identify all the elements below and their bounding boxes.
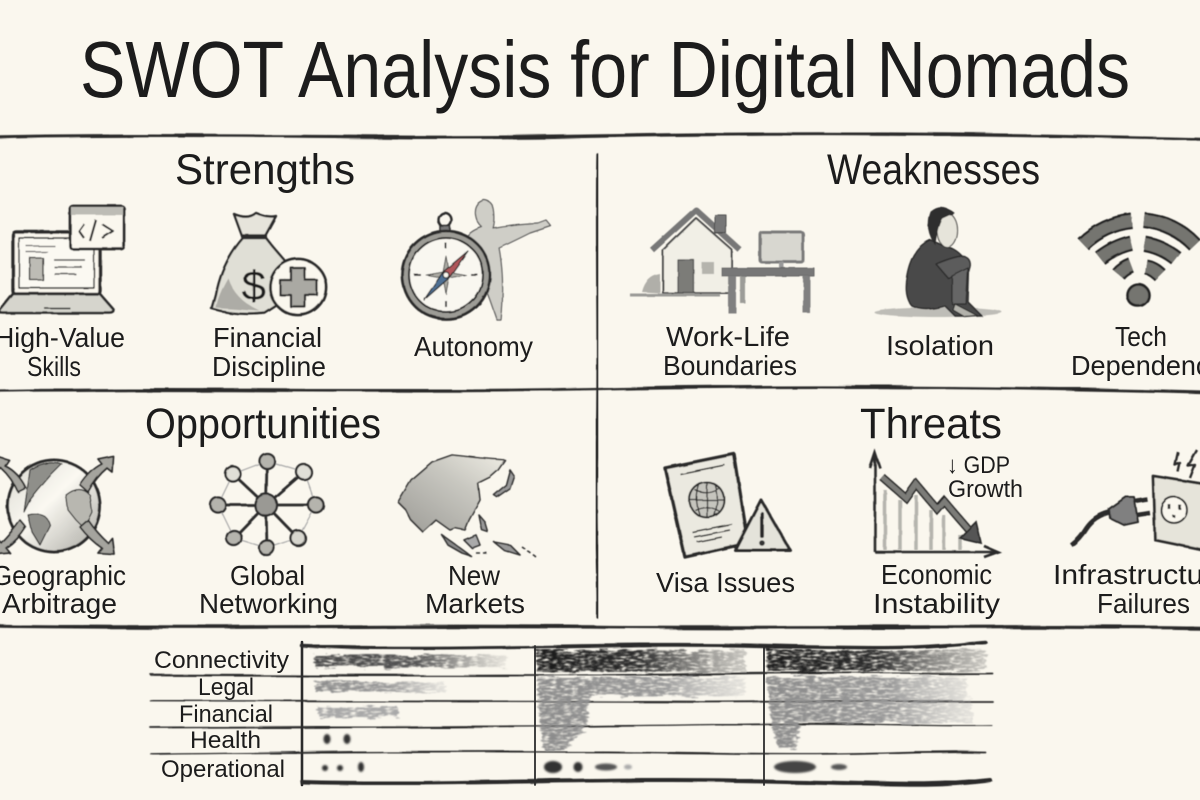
- row labels: Operational: [161, 756, 285, 783]
- shading: health and operational marks: [322, 734, 847, 773]
- table grid: [151, 642, 992, 785]
- label: work-life boundaries: [663, 321, 797, 381]
- icon: broken wifi: [1083, 220, 1195, 306]
- risk table: [151, 642, 992, 785]
- label: new markets: [425, 560, 525, 619]
- heading: strengths: Strengths: [175, 146, 355, 194]
- panel: weaknesses: [630, 146, 1200, 381]
- shading: column 1: [315, 655, 506, 717]
- icon: map of asia: [398, 455, 536, 557]
- row labels: Legal: [198, 674, 254, 701]
- row labels: Financial: [179, 701, 273, 728]
- icon: money bag with plus: $: [242, 262, 266, 309]
- icon: passport and warning: [665, 454, 790, 557]
- label: geographic arbitrage: Arbitrage: [2, 588, 117, 619]
- label: high-value skills: [0, 322, 125, 382]
- label: high-value skills: Skills: [27, 351, 81, 382]
- row labels: [154, 647, 289, 783]
- label: autonomy: Autonomy: [414, 331, 533, 362]
- heading: threats: Threats: [860, 400, 1002, 448]
- label: gdp growth annotation: ↓ GDP: [947, 452, 1010, 479]
- panel: opportunities: [0, 400, 536, 619]
- label: global networking: Global: [230, 560, 305, 591]
- label: new markets: New: [448, 560, 501, 591]
- label: economic instability: Instability: [873, 588, 1000, 619]
- panel: threats: [656, 400, 1200, 619]
- label: geographic arbitrage: [0, 560, 126, 619]
- label: economic instability: Economic: [881, 559, 992, 590]
- icon: plug and socket: [1071, 450, 1200, 550]
- icon: money bag with plus: [212, 213, 326, 315]
- label: isolation: Isolation: [886, 330, 994, 361]
- icon: network hub: [210, 454, 324, 556]
- label: work-life boundaries: Work-Life: [666, 321, 790, 352]
- row labels: Connectivity: [154, 647, 289, 674]
- row labels: Health: [190, 727, 261, 754]
- label: financial discipline: [212, 322, 326, 382]
- heading: opportunities: Opportunities: [145, 400, 381, 448]
- label: tech dependency: Tech: [1115, 321, 1167, 352]
- label: work-life boundaries: Boundaries: [663, 350, 797, 381]
- label: gdp growth annotation: Growth: [948, 476, 1023, 503]
- heading: weaknesses: Weaknesses: [827, 146, 1040, 194]
- label: global networking: Networking: [199, 588, 338, 619]
- label: financial discipline: Financial: [213, 322, 322, 353]
- label: visa issues: Visa Issues: [656, 567, 795, 598]
- icon: laptop with code window: [0, 206, 124, 313]
- label: tech dependency: [1071, 321, 1200, 381]
- label: gdp growth annotation: [947, 452, 1023, 503]
- shading: column 2: [537, 650, 745, 750]
- label: new markets: Markets: [425, 588, 525, 619]
- chart: falling gdp growth: [870, 452, 1023, 557]
- label: economic instability: [873, 559, 1000, 619]
- panel: strengths: [0, 146, 551, 382]
- label: infrastructure failures: [1053, 559, 1200, 619]
- shading: column 3: [767, 650, 986, 748]
- label: global networking: [199, 560, 338, 619]
- label: financial discipline: Discipline: [212, 351, 326, 382]
- icon: isolated sitting person: [874, 208, 1002, 317]
- icon: compass and figure: [402, 200, 551, 320]
- label: infrastructure failures: Failures: [1097, 588, 1190, 619]
- icon: globe with arrows: [0, 456, 114, 554]
- icon: house and desk: [630, 210, 814, 313]
